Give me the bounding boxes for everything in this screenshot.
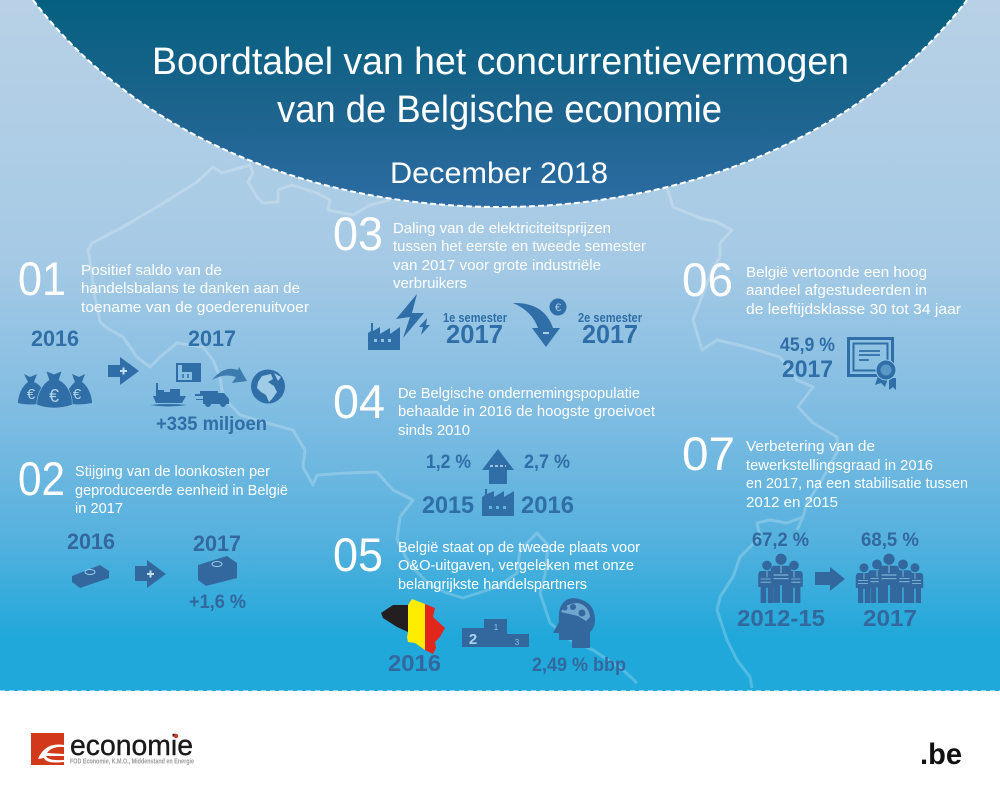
icon: head with gears [553,598,595,648]
logo: economie [31,730,194,766]
year 2016: 2016 [31,326,79,351]
map outline of Belgium [88,165,838,688]
title [152,41,849,131]
panel 07 [682,427,968,631]
icon: money bags: € [49,386,59,406]
number 01: 01 [18,252,66,305]
text 03: verbruikers [393,275,467,292]
icon: falling arrow with euro: € [555,302,561,314]
year 2017: 2017 [582,319,638,349]
year 2017: 2017 [188,326,236,351]
icon: factory with lightning [368,294,430,350]
year 2012-15: 2012-15 [737,605,825,631]
text 05: O&O-uitgaven, vergeleken met onze [398,557,634,574]
icon: money bags: € [73,386,82,403]
text 05 [398,539,640,593]
year 2016: 2016 [67,529,115,554]
year 2017: 2017 [193,531,241,556]
arrow plus [108,357,139,385]
panel 05 [333,528,640,676]
logo: economie: FOD Economie, K.M.O., Middenstand en Energie [70,758,194,766]
number 06: 06 [682,253,733,306]
year 2017: 2017 [863,605,917,631]
icon: money bags [18,371,92,408]
text 06: België vertoonde een hoog [746,264,927,281]
icon: up arrow [482,449,514,484]
text 03: Daling van de elektriciteitsprijzen [393,220,611,237]
text 07 [746,438,968,511]
panel 06 [682,253,961,390]
number 03: 03 [333,207,383,260]
icon: factory [482,489,514,516]
number 02: 02 [18,452,65,505]
text 03 [393,220,646,292]
text 01: toename van de goederenuitvoer [81,299,309,316]
label 2e semester: 2e semester [578,310,642,325]
text 01: Positief saldo van de [81,262,222,279]
text 06 [746,264,961,318]
arrow [815,567,845,591]
text 03: tussen het eerste en tweede semester [393,238,646,255]
panel 02 [18,452,288,613]
text 07: Verbetering van de [746,438,875,455]
panel 03 [333,207,646,350]
icon: ship [150,383,187,406]
icon: big money stack [198,556,237,586]
panel 04 [333,375,656,519]
value 45,9 %: 45,9 % [780,335,835,356]
text 07: 2012 en 2015 [746,494,838,511]
icon: curved arrow [212,367,247,383]
text 01: handelsbalans te danken aan de [81,280,300,297]
year 2017: 2017 [782,356,833,383]
year 2017: 2017 [446,319,503,349]
icon: globe [251,370,285,404]
value 2,7 %: 2,7 % [524,452,570,473]
year 2016: 2016 [388,650,441,676]
text 04: behaalde in 2016 de hoogste groeivoet [398,403,656,420]
icon: small money stack [72,565,109,588]
icon: money bags: € [27,386,36,403]
icon: three workers [758,554,803,603]
arrow plus [135,560,166,588]
value 68,5 %: 68,5 % [861,530,919,551]
text 05: belangrijkste handelspartners [398,576,587,593]
label 1e semester: 1e semester [443,310,507,325]
icon: podium [462,619,529,648]
icon: diploma [848,338,896,390]
text 07: en 2017, na een stabilisatie tussen [746,475,968,492]
icon: truck [195,391,229,407]
year 2016: 2016 [521,492,574,519]
value 2,49 % bbp: 2,49 % bbp [532,655,626,676]
icon: podium: 2 [469,631,477,648]
text 04: sinds 2010 [398,422,470,439]
number 07: 07 [682,427,735,480]
icon: Belgian flag map [381,599,445,654]
text 02: in 2017 [75,500,123,517]
logo: economie: economie [70,730,193,762]
panel 01 [18,252,309,435]
number 04: 04 [333,375,385,428]
value 67,2 %: 67,2 % [752,530,809,551]
icon: podium: 1 [494,623,499,632]
text 02: Stijging van de loonkosten per [75,463,270,480]
icon: five workers [856,554,923,603]
value 1,2 %: 1,2 % [426,452,471,473]
icon: podium: 3 [515,638,520,647]
text 07: tewerkstellingsgraad in 2016 [746,457,933,474]
year 2015: 2015 [422,492,474,519]
text 04: De Belgische ondernemingspopulatie [398,385,640,402]
title: van de Belgische economie [277,89,722,131]
date: December 2018 [390,157,608,190]
number 05: 05 [333,528,383,581]
title: Boordtabel van het concurrentievermogen [152,41,849,83]
text 04 [398,385,656,439]
text 06: aandeel afgestudeerden in [746,282,927,299]
icon: falling arrow with euro [513,298,566,347]
text 05: België staat op de tweede plaats voor [398,539,640,556]
text 06: de leeftijdsklasse 30 tot 34 jaar [746,301,961,318]
value +335 miljoen: +335 miljoen [156,414,267,435]
value +1,6 %: +1,6 % [189,592,246,613]
logo: .be: .be [920,738,962,771]
footer panel edge [0,690,1000,692]
text 01 [81,262,309,316]
header dome [33,0,967,207]
text 02: geproduceerde eenheid in België [75,482,288,499]
text 02 [75,463,288,517]
icon: box [177,364,200,381]
text 03: van 2017 voor grote industriële [393,257,601,274]
